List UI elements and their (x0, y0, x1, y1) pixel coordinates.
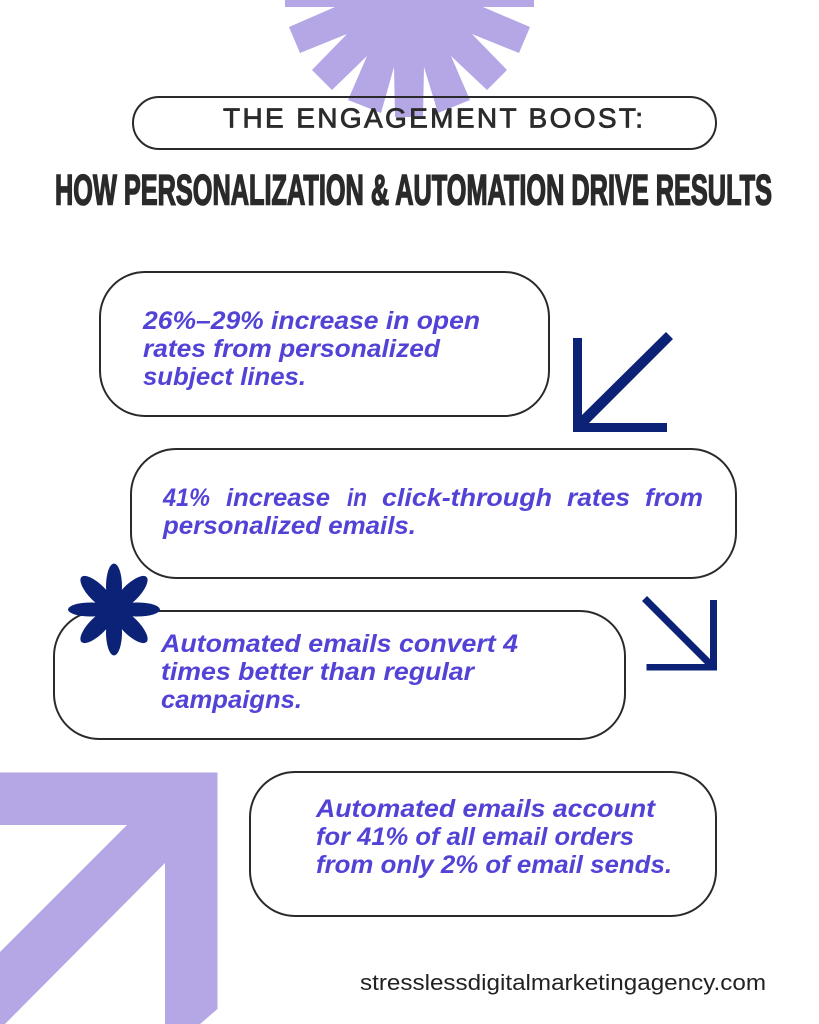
arrow: down-right navy (642, 596, 717, 670)
panel: open rates: 26%–29% increase in open (142, 307, 480, 335)
panel: click-through rates: personalized emails. (162, 512, 416, 540)
heading pill: the engagement boost: THE ENGAGEMENT BOOST: (223, 102, 643, 134)
icon: navy eight-petal flower (68, 564, 160, 656)
panel: click-through rates: from (645, 484, 703, 512)
panel: automated emails convert: times better than regular (161, 658, 475, 686)
panel: automated email orders: Automated emails account (315, 795, 657, 823)
panel: click-through rates: increase (226, 484, 330, 512)
website url: stresslessdigitalmarketingagency.com (360, 970, 766, 995)
panel: open rates: rates from personalized (143, 335, 441, 363)
panel: open rates: subject lines. (143, 363, 306, 391)
heading pill: the engagement boost (133, 97, 716, 149)
panel: automated email orders: from only 2% of email sends. (316, 851, 672, 879)
panel: automated email orders (250, 772, 716, 916)
panel: automated emails convert: campaigns. (161, 686, 302, 714)
panel: click-through rates: click-through (382, 484, 552, 512)
icon: lavender sunburst at top (285, 0, 534, 117)
arrow: down-left navy (573, 332, 673, 432)
panel: click-through rates: rates (567, 484, 630, 512)
panel: click-through rates: 41% (162, 484, 210, 512)
panel: open rates (100, 272, 549, 416)
panel: automated email orders: for 41% of all email orders (316, 823, 634, 851)
panel: click-through rates (131, 449, 736, 578)
panel: automated emails convert (54, 611, 625, 739)
panel: click-through rates: in (347, 484, 367, 512)
panel: automated emails convert: Automated emails convert 4 (160, 630, 518, 658)
icon: large lavender arrow (0, 772, 218, 1024)
